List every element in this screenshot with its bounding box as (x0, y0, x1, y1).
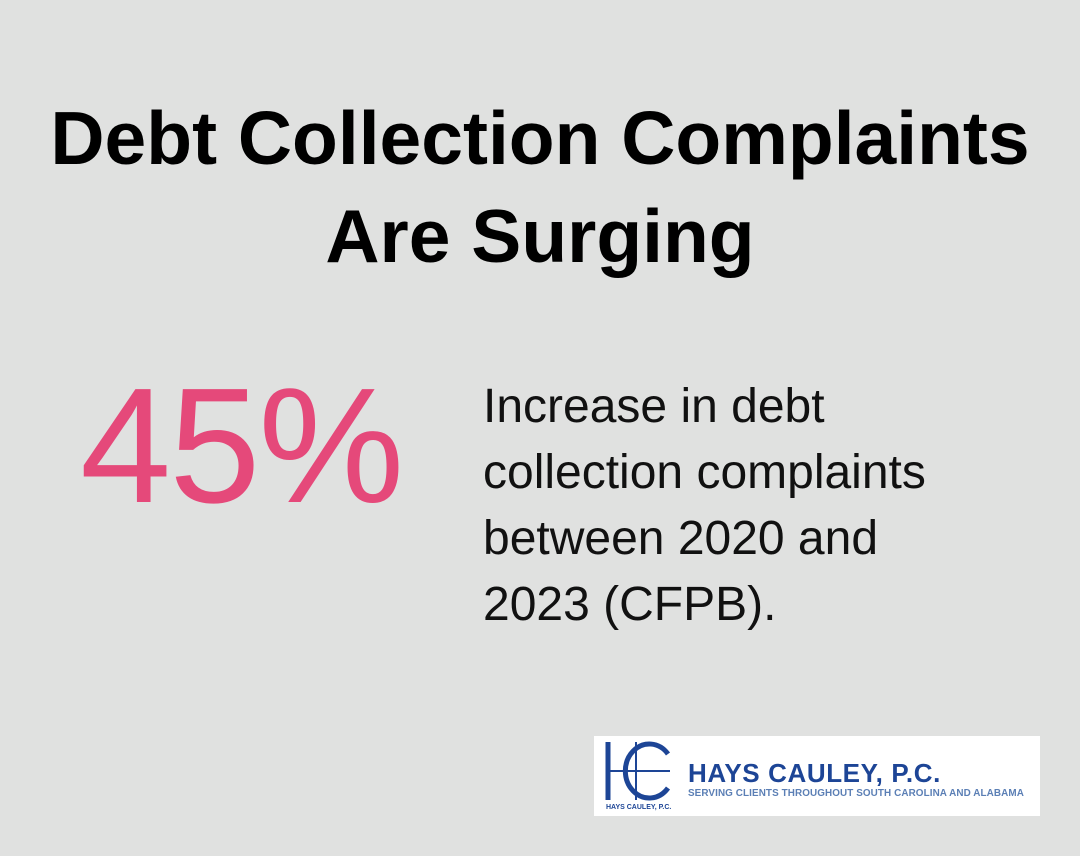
description text: between 2020 and (483, 512, 878, 565)
icon: HC monogram (606, 742, 670, 800)
title (50, 96, 1030, 278)
title: Debt Collection Complaints (50, 96, 1030, 180)
logo: Hays Cauley (594, 736, 1040, 816)
statistic: 45%: 45% (80, 354, 402, 537)
logo name: HAYS CAULEY, P.C. (688, 758, 941, 788)
description text: 2023 (CFPB). (483, 578, 776, 631)
description text: Increase in debt (483, 380, 825, 433)
logo tagline: SERVING CLIENTS THROUGHOUT SOUTH CAROLINA AND ALABAMA (688, 788, 1024, 799)
description text (483, 380, 926, 631)
logo small caption: HAYS CAULEY, P.C. (606, 804, 671, 811)
description text: collection complaints (483, 446, 926, 499)
title: Are Surging (325, 194, 755, 278)
